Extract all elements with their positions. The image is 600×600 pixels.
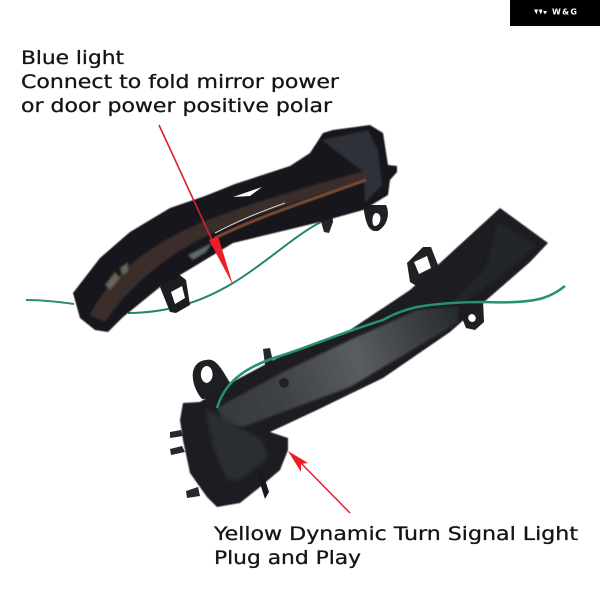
callout: blue light: Connect to fold mirror power bbox=[21, 71, 339, 93]
mirror lower clip bbox=[160, 272, 190, 313]
grey reflection bbox=[188, 243, 212, 260]
left lug bbox=[193, 360, 233, 399]
top housing highlight bbox=[322, 130, 382, 203]
side pegs bbox=[170, 430, 200, 498]
dimple bbox=[279, 378, 289, 388]
bottom fin bbox=[257, 470, 269, 499]
back panel bbox=[217, 306, 460, 427]
callout: blue light bbox=[21, 47, 339, 117]
brown lens strip bbox=[90, 170, 368, 322]
red arrow: to connector bbox=[288, 451, 350, 513]
lower box housing bbox=[205, 408, 268, 480]
wire left stub bbox=[26, 300, 74, 304]
top mirror: lens side bbox=[26, 125, 397, 332]
mirror body bbox=[180, 208, 548, 507]
right lug bbox=[462, 300, 484, 330]
upper clip bbox=[407, 247, 440, 287]
logo badge bbox=[510, 0, 600, 26]
callout: yellow light bbox=[213, 523, 578, 569]
callout: yellow light: Plug and Play bbox=[214, 547, 361, 569]
callout: blue light: or door power positive polar bbox=[21, 95, 332, 117]
bottom mirror: back side bbox=[170, 208, 548, 507]
pale spots on lens bbox=[105, 262, 128, 290]
small fin bbox=[263, 348, 283, 380]
mirror body bbox=[73, 125, 397, 332]
mirror lug bbox=[363, 205, 388, 231]
right tip ridge bbox=[452, 222, 536, 304]
logo badge: W&G bbox=[552, 8, 577, 16]
lower peg bbox=[320, 210, 333, 233]
copper reflection bbox=[215, 180, 366, 238]
white highlight bbox=[215, 203, 285, 233]
green wire on bottom mirror bbox=[217, 286, 565, 408]
callout: yellow light: Yellow Dynamic Turn Signal Light bbox=[213, 523, 578, 545]
green wire bbox=[128, 222, 321, 313]
red arrow: to lens bbox=[159, 125, 233, 285]
callout: blue light: Blue light bbox=[21, 47, 124, 69]
